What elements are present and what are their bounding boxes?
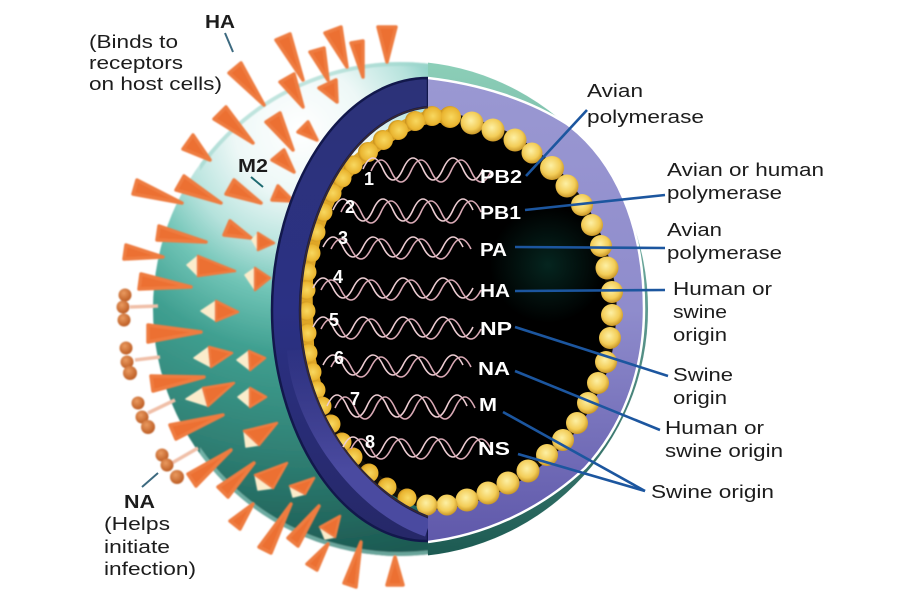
gene segment labels: HA <box>480 281 510 301</box>
text: PB2 origin <box>587 81 704 127</box>
text: NA origin: swine origin <box>665 441 783 461</box>
text: HA origin <box>673 279 772 345</box>
text: NA function: infection) <box>104 559 196 579</box>
gene segment labels: NS <box>478 439 510 459</box>
NA pointer <box>142 473 158 487</box>
viral envelope sphere <box>153 62 647 556</box>
text: NA function: initiate <box>104 537 170 557</box>
text: M and NS origin: Swine origin <box>651 482 774 502</box>
text: NP origin: Swine <box>673 365 733 385</box>
text: NP origin: origin <box>673 388 727 408</box>
text: HA origin: Human or <box>673 279 772 299</box>
text: PB1 origin: polymerase <box>667 183 782 203</box>
text: PB2 origin: polymerase <box>587 107 704 127</box>
gene segment labels: NA <box>478 359 510 379</box>
label: HA: HA <box>205 12 235 32</box>
segment numbers: 1 <box>364 169 374 189</box>
cut face: purple membrane ring <box>428 62 648 556</box>
HA pointer <box>225 33 233 52</box>
gene segment labels: PA <box>480 240 507 260</box>
capsid bead band, left side <box>306 116 450 390</box>
text: PA origin: polymerase <box>667 243 782 263</box>
viral core interior <box>306 116 612 505</box>
gene segment labels: NP <box>480 319 512 339</box>
gene segment labels: PB2 <box>480 167 522 187</box>
NA surface proteins <box>116 288 198 484</box>
text: NA origin: Human or <box>665 418 764 438</box>
segment numbers: 4 <box>333 267 343 287</box>
text: PA origin: Avian <box>667 220 722 240</box>
text: HA function: on host cells) <box>89 74 222 94</box>
text: NP origin <box>673 365 733 408</box>
text: PB1 origin <box>667 160 824 203</box>
M2 pointer <box>251 177 263 187</box>
text: HA function: (Binds to <box>89 32 178 52</box>
text: PB2 origin: Avian <box>587 81 643 101</box>
gene segment labels: PB1 <box>480 203 521 223</box>
gene segment labels: M <box>479 395 497 415</box>
virus diagram <box>90 15 823 590</box>
cut face: dark blue shell <box>272 78 428 541</box>
leader lines to origin labels <box>503 110 668 491</box>
capsid beads <box>296 106 623 516</box>
HA surface spikes <box>124 27 403 587</box>
label: M2: M2 <box>238 156 268 176</box>
text: NA function: (Helps <box>104 514 170 534</box>
infographic: influenza virus cross-section <box>90 15 823 590</box>
text: PB1 origin: Avian or human <box>667 160 824 180</box>
text: HA function <box>89 32 222 94</box>
HA spikes seen end-on with pale tips <box>186 233 340 539</box>
text: NA function <box>104 514 196 579</box>
segment numbers: 2 <box>345 197 355 217</box>
segment numbers: 3 <box>338 228 348 248</box>
text: HA origin: origin <box>673 325 727 345</box>
RNA segment helices <box>313 158 491 459</box>
segment numbers: 6 <box>334 348 344 368</box>
segment numbers: 5 <box>329 310 339 330</box>
text: PA origin <box>667 220 782 263</box>
segment numbers <box>329 169 375 452</box>
label: NA: NA <box>124 492 155 512</box>
segment numbers: 7 <box>350 389 360 409</box>
segment numbers: 8 <box>365 432 375 452</box>
text: NA origin <box>665 418 783 461</box>
gene segment labels <box>478 167 522 459</box>
text: HA function: receptors <box>89 53 183 73</box>
text: HA origin: swine <box>673 302 727 322</box>
